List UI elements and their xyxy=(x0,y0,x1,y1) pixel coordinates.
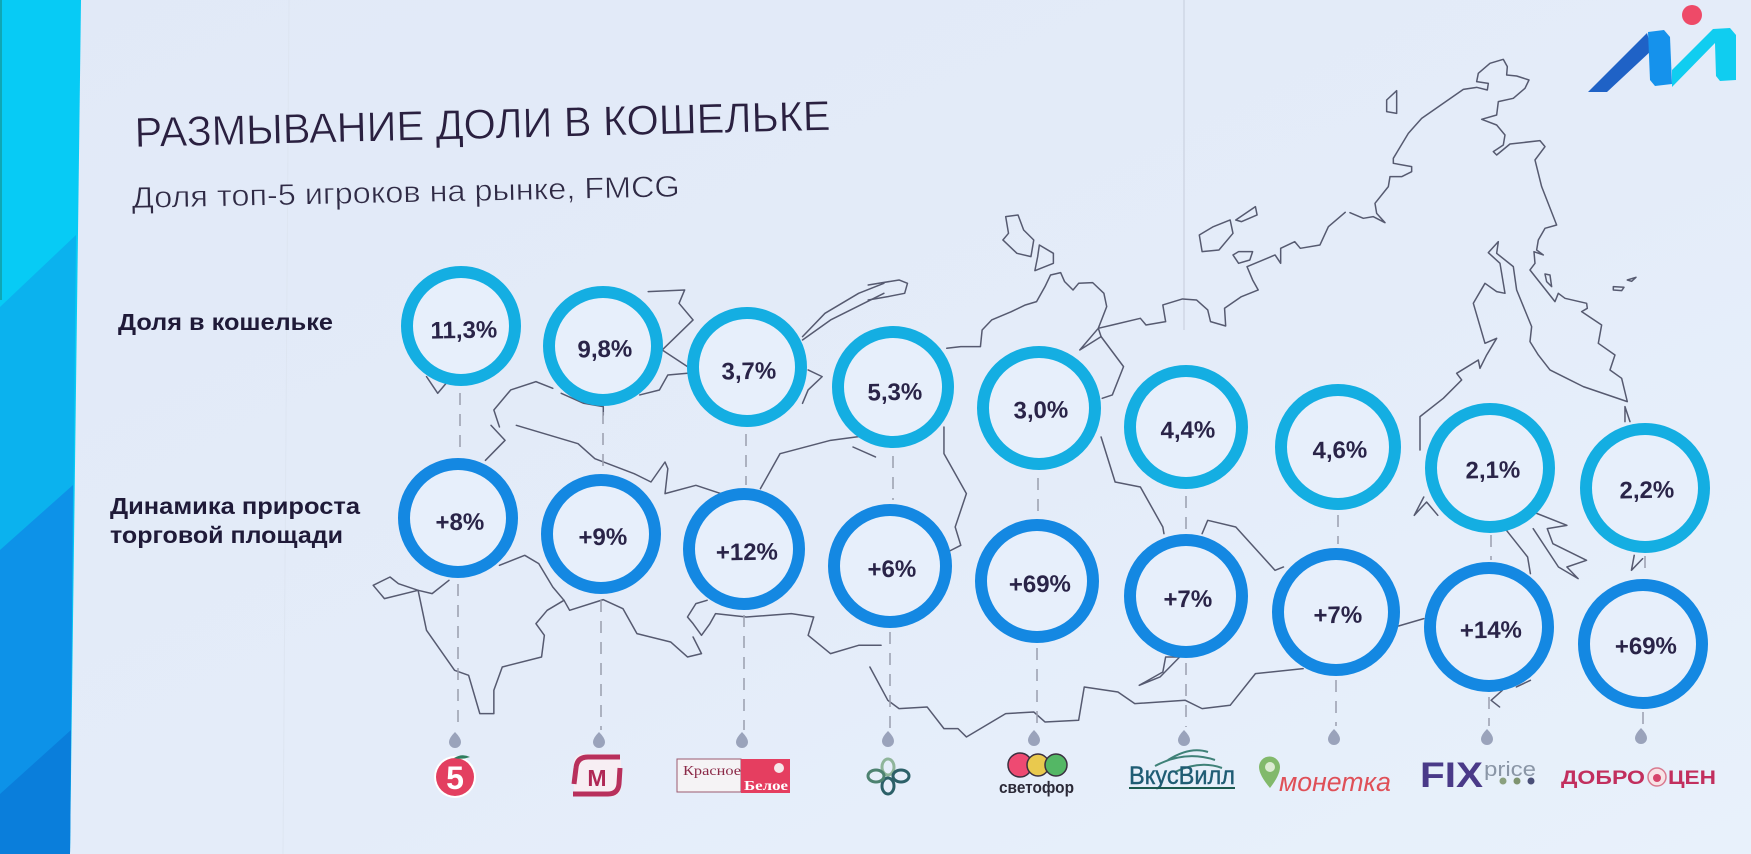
row label: sales area growth: Динамика прироста xyxy=(110,493,361,519)
logo: Monetka xyxy=(1259,757,1391,797)
logo: Fix Price: FIX xyxy=(1420,756,1484,795)
ring: growth +6% xyxy=(834,510,946,622)
ring: growth +7%: +7% xyxy=(1163,586,1212,613)
ring: growth +14%: +14% xyxy=(1460,616,1522,645)
logo: Magnit: М xyxy=(587,765,607,791)
logo: Fix Price: price xyxy=(1484,759,1536,781)
dashed connectors xyxy=(458,393,1645,730)
logo: Krasnoe i Beloe xyxy=(677,759,790,794)
connector end dots xyxy=(449,728,1647,748)
ring: share 9,8%: 9,8% xyxy=(577,336,632,363)
ring: growth +69% second xyxy=(1584,585,1702,703)
logo: Svetofor xyxy=(999,753,1074,797)
logo: Magnit xyxy=(573,754,621,796)
ring: share 4,4%: 4,4% xyxy=(1160,417,1215,444)
ring: share 11,3% xyxy=(407,272,515,380)
ring: growth +6%: +6% xyxy=(867,556,916,583)
ring: growth +9%: +9% xyxy=(578,524,627,551)
ring: growth +69%: +69% xyxy=(1009,570,1071,599)
map of Russia outline xyxy=(373,59,1643,737)
ring: share 4,6% xyxy=(1281,390,1395,504)
logo: Fix Price xyxy=(1420,756,1536,795)
logo: VkusVill wordmark xyxy=(1129,750,1235,790)
ring: share 5,3%: 5,3% xyxy=(867,379,922,406)
ring: share 3,7%: 3,7% xyxy=(721,358,776,385)
ring: share 5,3% xyxy=(838,332,948,442)
ring: share 4,6%: 4,6% xyxy=(1312,437,1367,464)
ring: growth +7% xyxy=(1130,540,1242,652)
ring: growth +14% xyxy=(1430,568,1548,686)
row label: sales area growth: торговой площади xyxy=(110,522,343,548)
logo: Dobrotsen: ЦЕН xyxy=(1668,768,1716,789)
logo: Pyaterochka xyxy=(434,755,476,798)
ring: share 4,4% xyxy=(1130,371,1242,483)
logo: Svetofor: светофор xyxy=(999,778,1074,797)
logo: Dobrotsen xyxy=(1561,768,1716,789)
ring: share 2,1%: 2,1% xyxy=(1465,457,1520,484)
title: РАЗМЫВАНИЕ ДОЛИ В КОШЕЛЬКЕ xyxy=(134,92,831,156)
logo: Krasnoe i Beloe: Красное xyxy=(683,764,741,779)
ring: share 2,2%: 2,2% xyxy=(1619,477,1674,504)
ring: share 3,0% xyxy=(983,352,1095,464)
ring: share 3,7% xyxy=(693,313,801,421)
logo: top right xyxy=(1588,5,1736,92)
row label: share of wallet: Доля в кошельке xyxy=(118,309,333,335)
logo: VkusVill clover xyxy=(868,759,909,794)
ring: growth +69% second: +69% xyxy=(1615,632,1677,661)
row label: sales area growth xyxy=(110,493,361,548)
ring: growth +7% second xyxy=(1278,554,1394,670)
subtitle: Доля топ-5 игроков на рынке, FMCG xyxy=(131,171,680,215)
ring: growth +8% xyxy=(404,464,512,572)
ring: share 2,2% xyxy=(1586,429,1704,547)
ring: growth +9% xyxy=(547,480,655,588)
ring: growth +69% xyxy=(981,525,1093,637)
ring: share 2,1% xyxy=(1431,409,1549,527)
ring: growth +8%: +8% xyxy=(435,509,484,536)
ring: growth +12%: +12% xyxy=(716,538,778,567)
logo: Krasnoe i Beloe: Белое xyxy=(744,779,788,794)
logo: Dobrotsen: ДОБРО xyxy=(1561,768,1645,789)
logo: Monetka: монетка xyxy=(1279,767,1391,797)
left decorative stripe xyxy=(0,0,81,854)
ring: share 9,8% xyxy=(549,292,657,400)
ring: share 3,0%: 3,0% xyxy=(1013,397,1068,424)
ring: share 11,3%: 11,3% xyxy=(430,316,497,345)
logo: VkusVill wordmark: ВкусВилл xyxy=(1129,762,1235,790)
ring: growth +12% xyxy=(689,494,799,604)
ring: growth +7% second: +7% xyxy=(1313,602,1362,629)
logo: Pyaterochka: 5 xyxy=(446,760,464,796)
